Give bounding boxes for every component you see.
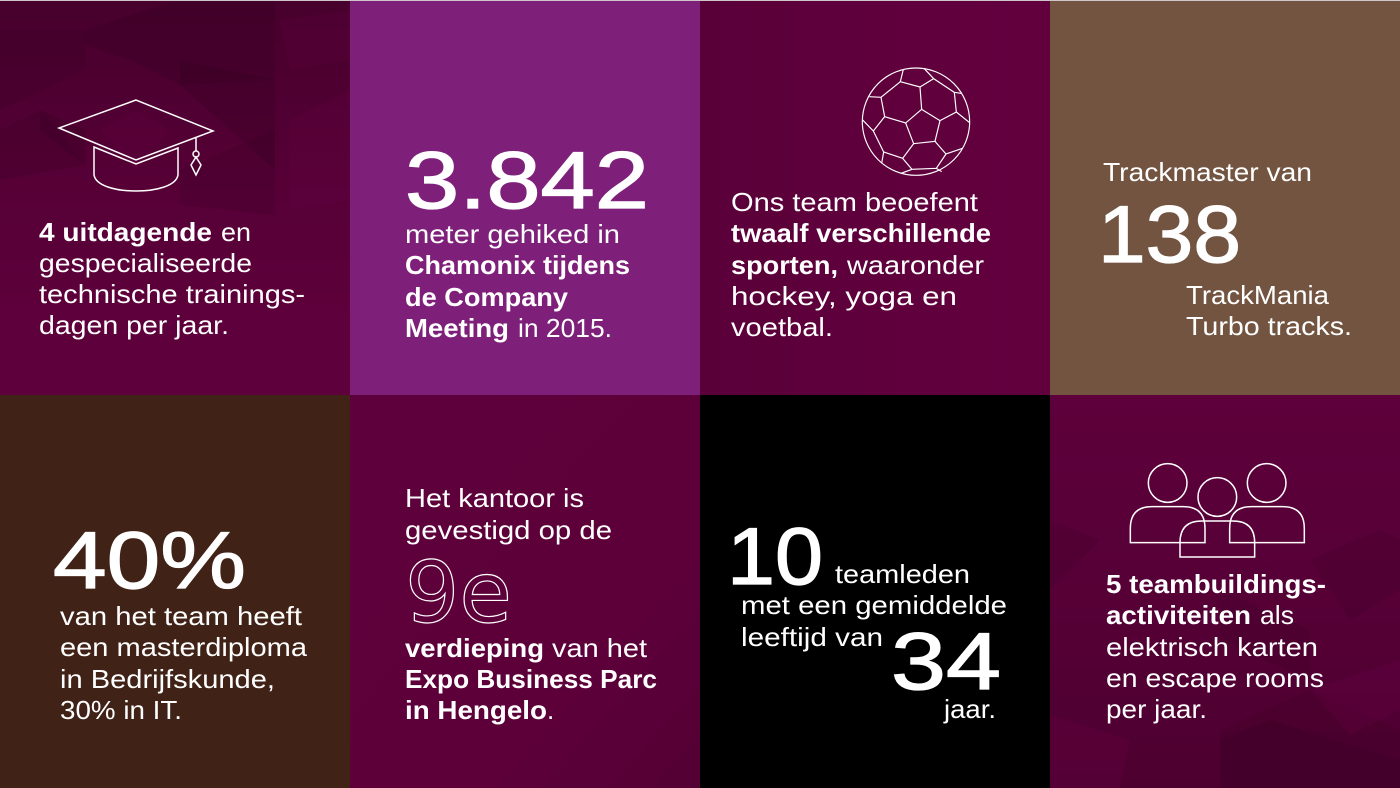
text: masters degree bbox=[60, 601, 308, 725]
text: office address: verdieping bbox=[405, 633, 544, 663]
panel background bbox=[1050, 0, 1400, 395]
text: teambuilding: als bbox=[1260, 600, 1294, 630]
text: office address: Expo Business Parc bbox=[405, 664, 657, 694]
text: teambuilding: 5 teambuildings- bbox=[1106, 569, 1326, 599]
panel background bbox=[700, 0, 1050, 395]
text: Chamonix hike: meter gehiked in bbox=[405, 219, 620, 249]
big number: 138: 138 bbox=[1098, 190, 1241, 280]
text: Chamonix hike: Meeting bbox=[405, 313, 509, 343]
text: masters degree: 30% in IT. bbox=[60, 695, 182, 725]
text: training days: dagen per jaar. bbox=[39, 310, 229, 340]
text: sports: twaalf verschillende bbox=[731, 218, 991, 248]
text: office address: . bbox=[547, 695, 554, 725]
text: training days: technische trainings- bbox=[39, 279, 305, 309]
text: office address: in Hengelo bbox=[405, 695, 547, 725]
geometric pattern bbox=[0, 0, 350, 215]
panel background bbox=[1050, 395, 1400, 788]
panel: TrackMania bbox=[1050, 0, 1400, 395]
text: office intro: Het kantoor is bbox=[405, 483, 584, 513]
text: office address bbox=[405, 633, 657, 725]
big number: 3.842: 3.842 bbox=[405, 136, 649, 226]
panel: teambuilding bbox=[1050, 395, 1400, 788]
text: years: jaar. bbox=[943, 694, 996, 724]
text: teambuilding: activiteiten bbox=[1106, 600, 1251, 630]
panel: technical training days bbox=[0, 0, 350, 395]
text: team members: met een gemiddelde bbox=[741, 590, 1007, 620]
text: sports: sporten, bbox=[731, 250, 838, 280]
text: office intro bbox=[405, 483, 612, 545]
text: masters degree: een masterdiploma bbox=[60, 632, 308, 662]
text: teambuilding bbox=[1106, 569, 1326, 724]
text: Chamonix hike bbox=[405, 219, 630, 343]
panel background bbox=[0, 395, 350, 788]
big number: 34: 34 bbox=[891, 617, 1001, 707]
text: TrackMania tracks: Turbo tracks. bbox=[1186, 311, 1352, 341]
panel: Chamonix hike bbox=[350, 0, 700, 395]
text: sports: hockey, yoga en bbox=[731, 281, 957, 311]
text: training days: gespecialiseerde bbox=[39, 248, 252, 278]
text: sports bbox=[731, 187, 991, 342]
panel background bbox=[700, 395, 1050, 788]
text: training days: en bbox=[221, 217, 251, 247]
text: training days bbox=[39, 217, 305, 340]
panel background bbox=[0, 0, 350, 395]
text: Chamonix hike: Chamonix tijdens bbox=[405, 250, 630, 280]
text: teambuilding: en escape rooms bbox=[1106, 663, 1324, 693]
icon: football bbox=[862, 68, 970, 175]
text: office intro: gevestigd op de bbox=[405, 515, 612, 545]
panel: team age bbox=[700, 395, 1050, 788]
text: team members: teamleden bbox=[835, 559, 970, 589]
text: team members: leeftijd van bbox=[741, 622, 883, 652]
panel: office location bbox=[350, 395, 700, 788]
text: Chamonix hike: de Company bbox=[405, 282, 569, 312]
panel background bbox=[350, 395, 700, 788]
icon: people bbox=[1130, 464, 1304, 557]
text: teambuilding: per jaar. bbox=[1106, 694, 1207, 724]
text: TrackMania tracks bbox=[1186, 280, 1352, 341]
text: masters degree: van het team heeft bbox=[60, 601, 303, 631]
icon: graduation cap bbox=[59, 100, 213, 191]
text: masters degree: in Bedrijfskunde, bbox=[60, 664, 275, 694]
outlined number: 9e: 9e bbox=[405, 544, 512, 643]
panel: masters degree bbox=[0, 395, 350, 788]
text: office address: van het bbox=[552, 633, 648, 663]
panel: sports bbox=[700, 0, 1050, 395]
text: Trackmaster: Trackmaster van bbox=[1103, 157, 1312, 187]
text: Chamonix hike: in 2015. bbox=[518, 313, 612, 343]
text: TrackMania tracks: TrackMania bbox=[1186, 280, 1330, 310]
big number: 40%: 40% bbox=[53, 516, 246, 606]
text: teambuilding: elektrisch karten bbox=[1106, 632, 1318, 662]
text: sports: voetbal. bbox=[731, 312, 833, 342]
text: sports: Ons team beoefent bbox=[731, 187, 979, 217]
geometric pattern bbox=[1050, 520, 1400, 788]
text: team members bbox=[741, 559, 1007, 652]
big number: 10: 10 bbox=[727, 512, 823, 602]
text: sports: waaronder bbox=[846, 250, 984, 280]
text: training days: 4 uitdagende bbox=[39, 217, 212, 247]
panel background bbox=[350, 0, 700, 395]
